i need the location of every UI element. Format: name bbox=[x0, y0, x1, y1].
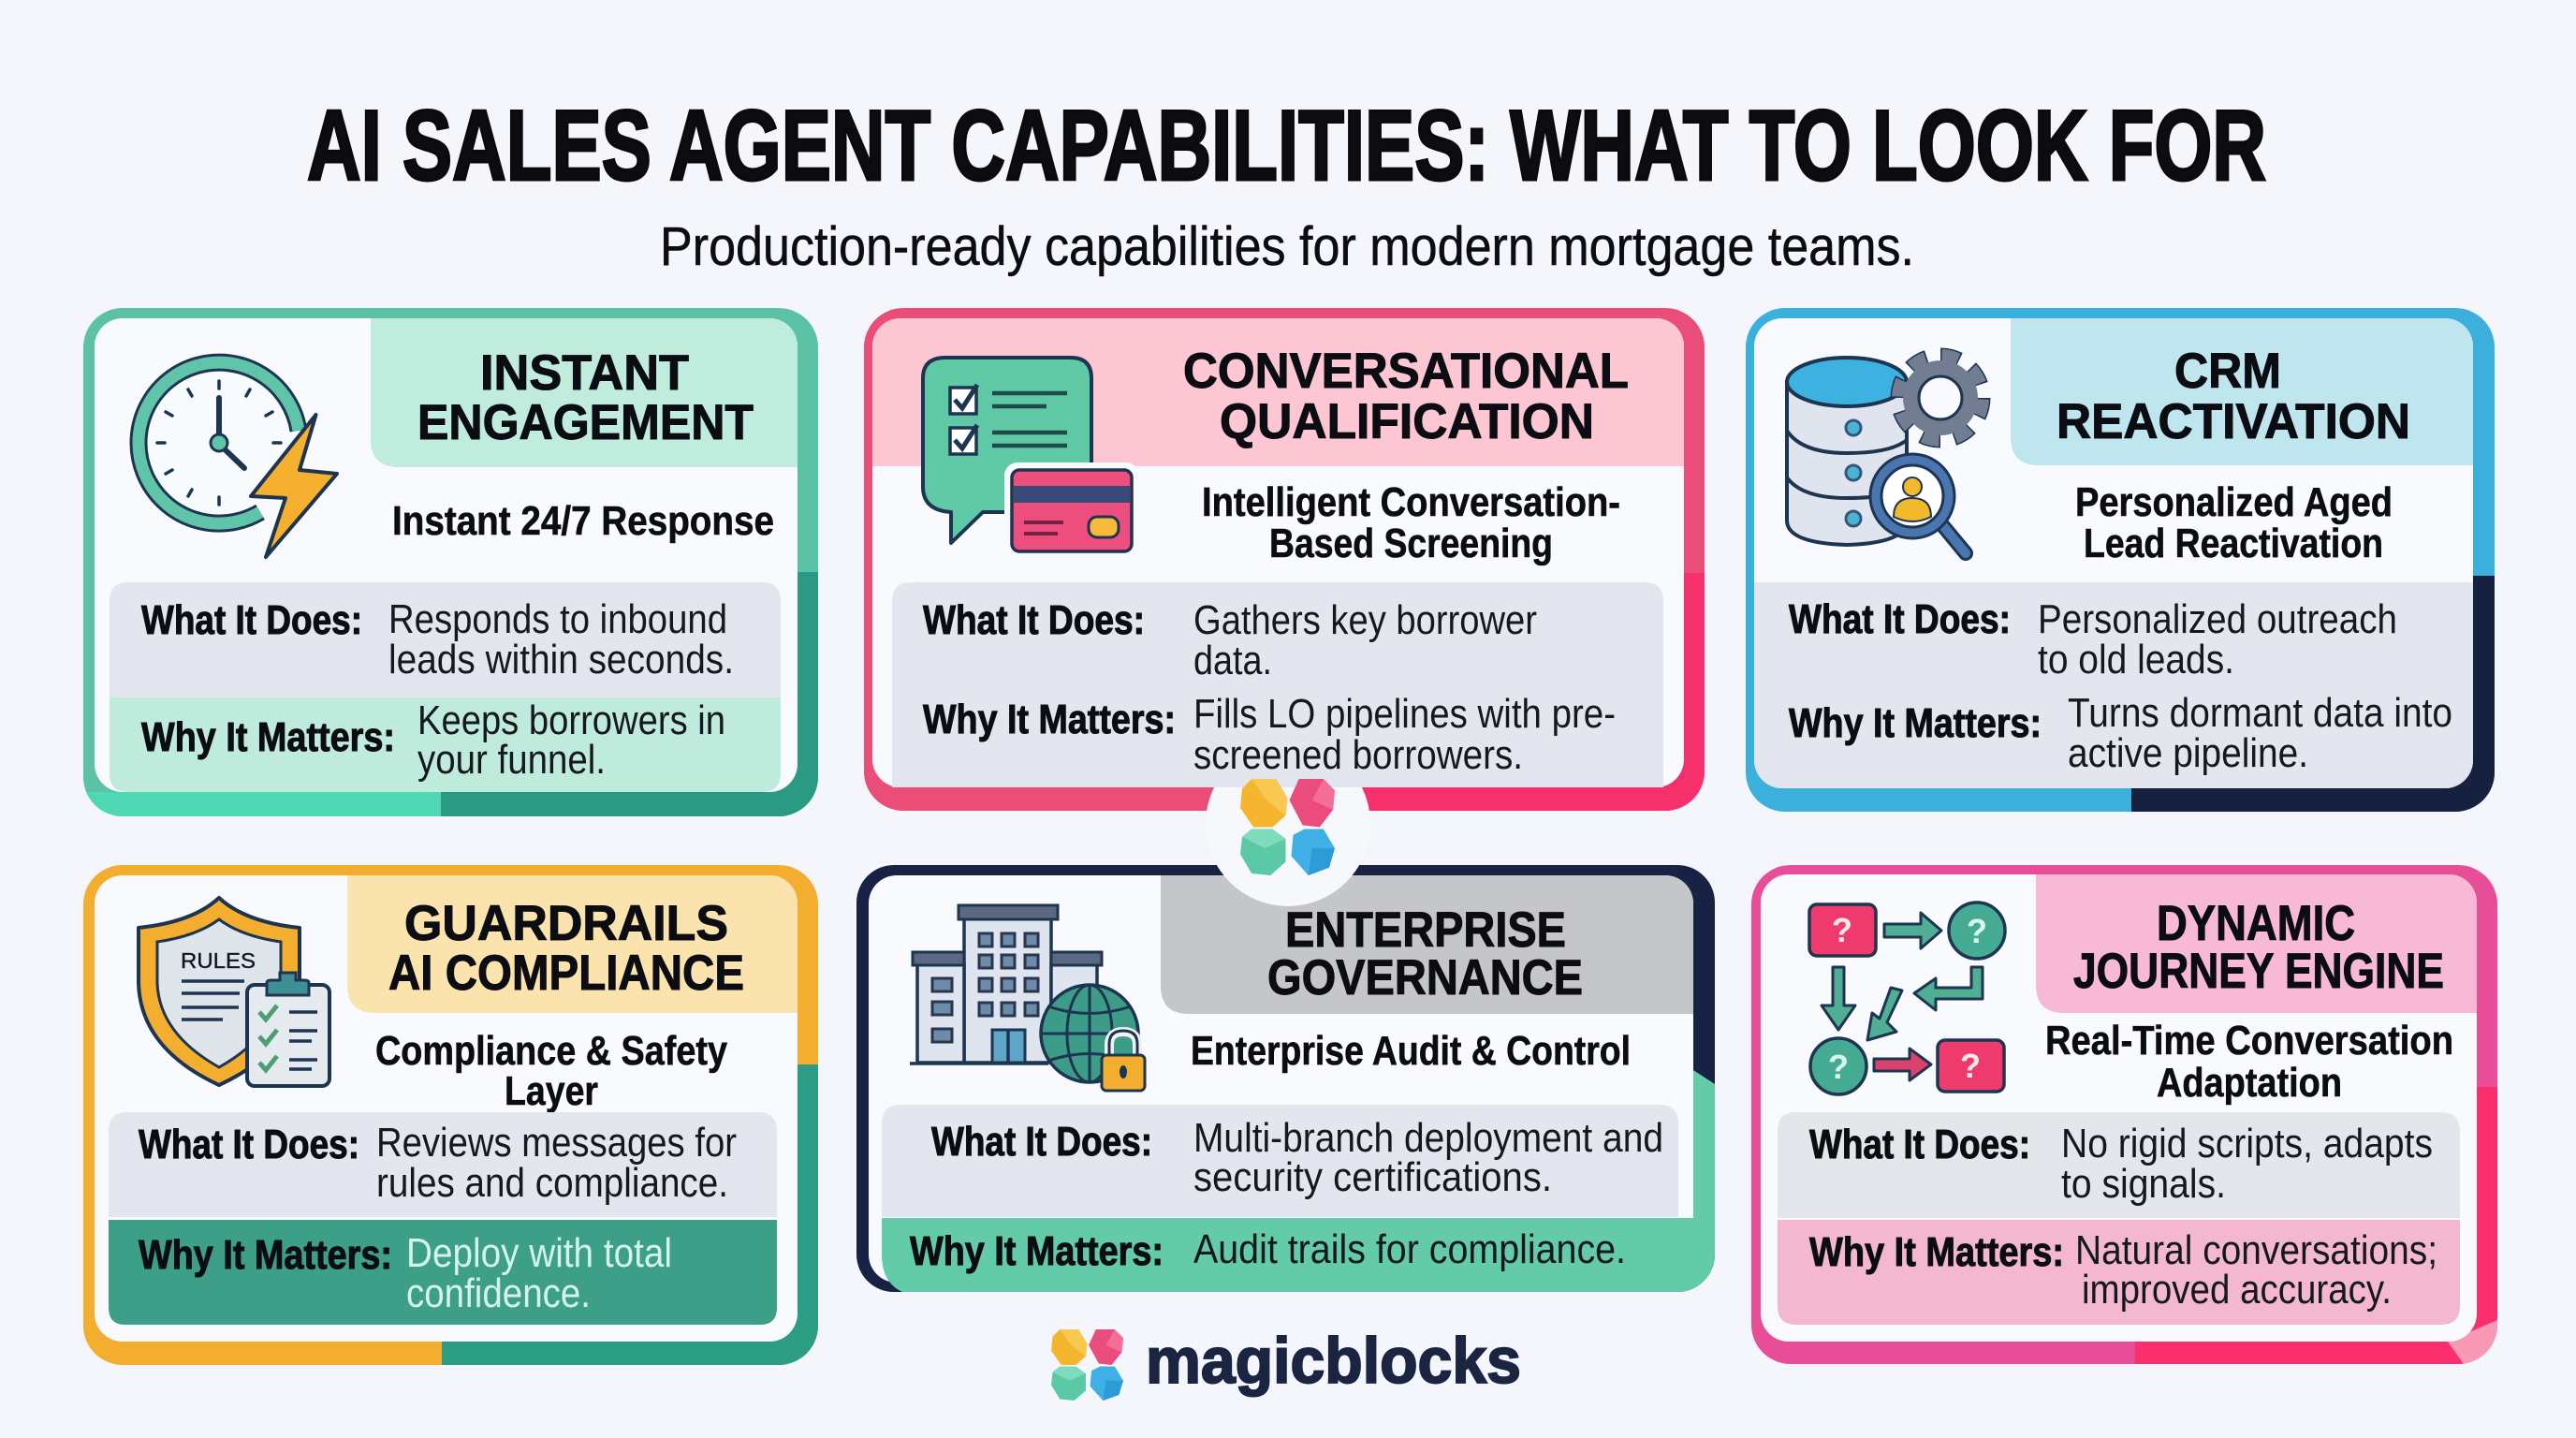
what it does row: What It Does: bbox=[141, 597, 362, 643]
icon: journey flow of question nodes: ? bbox=[1960, 1047, 1981, 1085]
subheading bbox=[2075, 479, 2393, 566]
what it does row: leads within seconds. bbox=[388, 637, 734, 682]
why it matters row: confidence. bbox=[406, 1270, 591, 1316]
heading bbox=[2073, 896, 2444, 999]
heading bbox=[2056, 344, 2410, 449]
logo mark bbox=[1051, 1329, 1123, 1401]
subheading: Real-Time Conversation bbox=[2045, 1018, 2453, 1064]
why it matters row bbox=[110, 697, 781, 792]
heading bbox=[1183, 344, 1629, 449]
why it matters row bbox=[1778, 1220, 2460, 1325]
why it matters row: Natural conversations; bbox=[2075, 1227, 2437, 1273]
icon: shield with rules and clipboard: RULES bbox=[181, 948, 256, 973]
what it does row bbox=[110, 582, 781, 697]
heading: AI COMPLIANCE bbox=[388, 946, 744, 1001]
what it does row: to signals. bbox=[2061, 1161, 2226, 1207]
panel: dynamic journey engine bbox=[1751, 865, 2497, 1364]
heading: ENTERPRISE bbox=[1285, 902, 1566, 958]
what it does row bbox=[109, 1112, 777, 1217]
why it matters: screened borrowers. bbox=[1193, 732, 1523, 778]
what it does row: What It Does: bbox=[931, 1119, 1152, 1165]
why it matters bbox=[923, 691, 1616, 778]
heading: INSTANT bbox=[480, 345, 689, 401]
panel: conversational qualification bbox=[864, 308, 1705, 811]
what it does: What It Does: bbox=[1789, 596, 2011, 642]
subheading: Adaptation bbox=[2157, 1060, 2342, 1106]
subheading: Instant 24/7 Response bbox=[392, 498, 774, 544]
heading: CONVERSATIONAL bbox=[1183, 344, 1629, 399]
lock bbox=[1102, 1031, 1145, 1091]
what it does bbox=[923, 597, 1537, 683]
subtitle: Production-ready capabilities for modern mortgage teams. bbox=[660, 216, 1914, 277]
details box bbox=[892, 582, 1663, 787]
subheading: Intelligent Conversation- bbox=[1202, 479, 1620, 525]
why it matters row: Deploy with total bbox=[406, 1230, 672, 1276]
heading: JOURNEY ENGINE bbox=[2073, 944, 2444, 999]
heading bbox=[388, 896, 744, 1001]
gear bbox=[1898, 356, 1983, 440]
subheading: Lead Reactivation bbox=[2084, 521, 2383, 566]
what it does: to old leads. bbox=[2038, 637, 2234, 682]
what it does row: Responds to inbound bbox=[388, 596, 727, 642]
heading: DYNAMIC bbox=[2157, 896, 2355, 951]
subheading: Enterprise Audit & Control bbox=[1191, 1028, 1631, 1074]
globe bbox=[1041, 985, 1138, 1082]
icon: clock with lightning bolt bbox=[139, 362, 337, 557]
what it does: data. bbox=[1193, 638, 1272, 683]
what it does: Gathers key borrower bbox=[1193, 597, 1537, 643]
subheading bbox=[375, 1028, 727, 1114]
what it does row: security certifications. bbox=[1193, 1154, 1552, 1200]
why it matters: Why It Matters: bbox=[923, 697, 1176, 742]
heading: CRM bbox=[2174, 344, 2281, 399]
subheading bbox=[2045, 1018, 2453, 1106]
panel: instant engagement bbox=[83, 308, 818, 816]
subheading: Personalized Aged bbox=[2075, 479, 2393, 525]
subheading: Compliance & Safety bbox=[375, 1028, 727, 1074]
icon: office building with globe and lock bbox=[910, 905, 1145, 1091]
icon: journey flow of question nodes: ? bbox=[1967, 912, 1987, 950]
heading bbox=[417, 345, 754, 450]
icon: shield with rules and clipboard bbox=[139, 898, 329, 1086]
icon: database gear and magnifier bbox=[1787, 356, 1983, 553]
what it does row: Reviews messages for bbox=[376, 1120, 737, 1166]
why it matters row: Why It Matters: bbox=[141, 714, 395, 760]
why it matters row bbox=[109, 1220, 777, 1325]
what it does row bbox=[882, 1105, 1678, 1217]
heading bbox=[1267, 902, 1583, 1005]
why it matters row: improved accuracy. bbox=[2082, 1267, 2392, 1313]
icon: journey flow of question nodes: ? bbox=[1828, 1048, 1849, 1086]
wordmark: magicblocks bbox=[1146, 1325, 1521, 1397]
what it does row bbox=[1778, 1112, 2460, 1218]
magnifier bbox=[1876, 460, 1966, 553]
why it matters row bbox=[882, 1070, 1715, 1292]
footer logo bbox=[1051, 1325, 1521, 1401]
what it does row: rules and compliance. bbox=[376, 1160, 728, 1206]
subheading: Based Screening bbox=[1269, 521, 1553, 566]
panel: guardrails ai compliance bbox=[83, 865, 818, 1365]
why it matters: Fills LO pipelines with pre- bbox=[1193, 691, 1616, 737]
heading: ENGAGEMENT bbox=[417, 395, 754, 450]
what it does bbox=[1789, 596, 2397, 682]
why it matters: Why It Matters: bbox=[1789, 700, 2042, 746]
heading: REACTIVATION bbox=[2056, 394, 2410, 449]
why it matters row: Keeps borrowers in bbox=[417, 697, 725, 743]
why it matters row: Why It Matters: bbox=[910, 1228, 1164, 1274]
why it matters: Turns dormant data into bbox=[2068, 690, 2452, 736]
what it does: What It Does: bbox=[923, 597, 1145, 643]
what it does row: What It Does: bbox=[139, 1122, 359, 1167]
panel: crm reactivation bbox=[1746, 308, 2495, 812]
why it matters row: your funnel. bbox=[417, 737, 606, 783]
why it matters row: Why It Matters: bbox=[139, 1232, 392, 1278]
heading: GUARDRAILS bbox=[404, 896, 728, 951]
icon: journey flow of question nodes bbox=[1809, 902, 2005, 1094]
heading: GOVERNANCE bbox=[1267, 950, 1583, 1005]
heading: QUALIFICATION bbox=[1220, 394, 1594, 449]
what it does row: No rigid scripts, adapts bbox=[2061, 1121, 2433, 1167]
subheading: Layer bbox=[505, 1068, 598, 1114]
subheading bbox=[1202, 479, 1620, 566]
details box bbox=[1754, 582, 2473, 788]
why it matters row: Audit trails for compliance. bbox=[1193, 1226, 1626, 1272]
panel: enterprise governance bbox=[856, 865, 1715, 1292]
what it does row: What It Does: bbox=[1809, 1122, 2030, 1167]
center logo badge bbox=[1207, 779, 1369, 906]
icon: chat checklist and credit card bbox=[923, 358, 1139, 560]
why it matters bbox=[1789, 690, 2452, 776]
icon: journey flow of question nodes: ? bbox=[1832, 911, 1852, 949]
why it matters row: Why It Matters: bbox=[1809, 1229, 2064, 1275]
what it does: Personalized outreach bbox=[2038, 596, 2397, 642]
what it does row: Multi-branch deployment and bbox=[1193, 1115, 1663, 1161]
why it matters: active pipeline. bbox=[2068, 730, 2308, 776]
